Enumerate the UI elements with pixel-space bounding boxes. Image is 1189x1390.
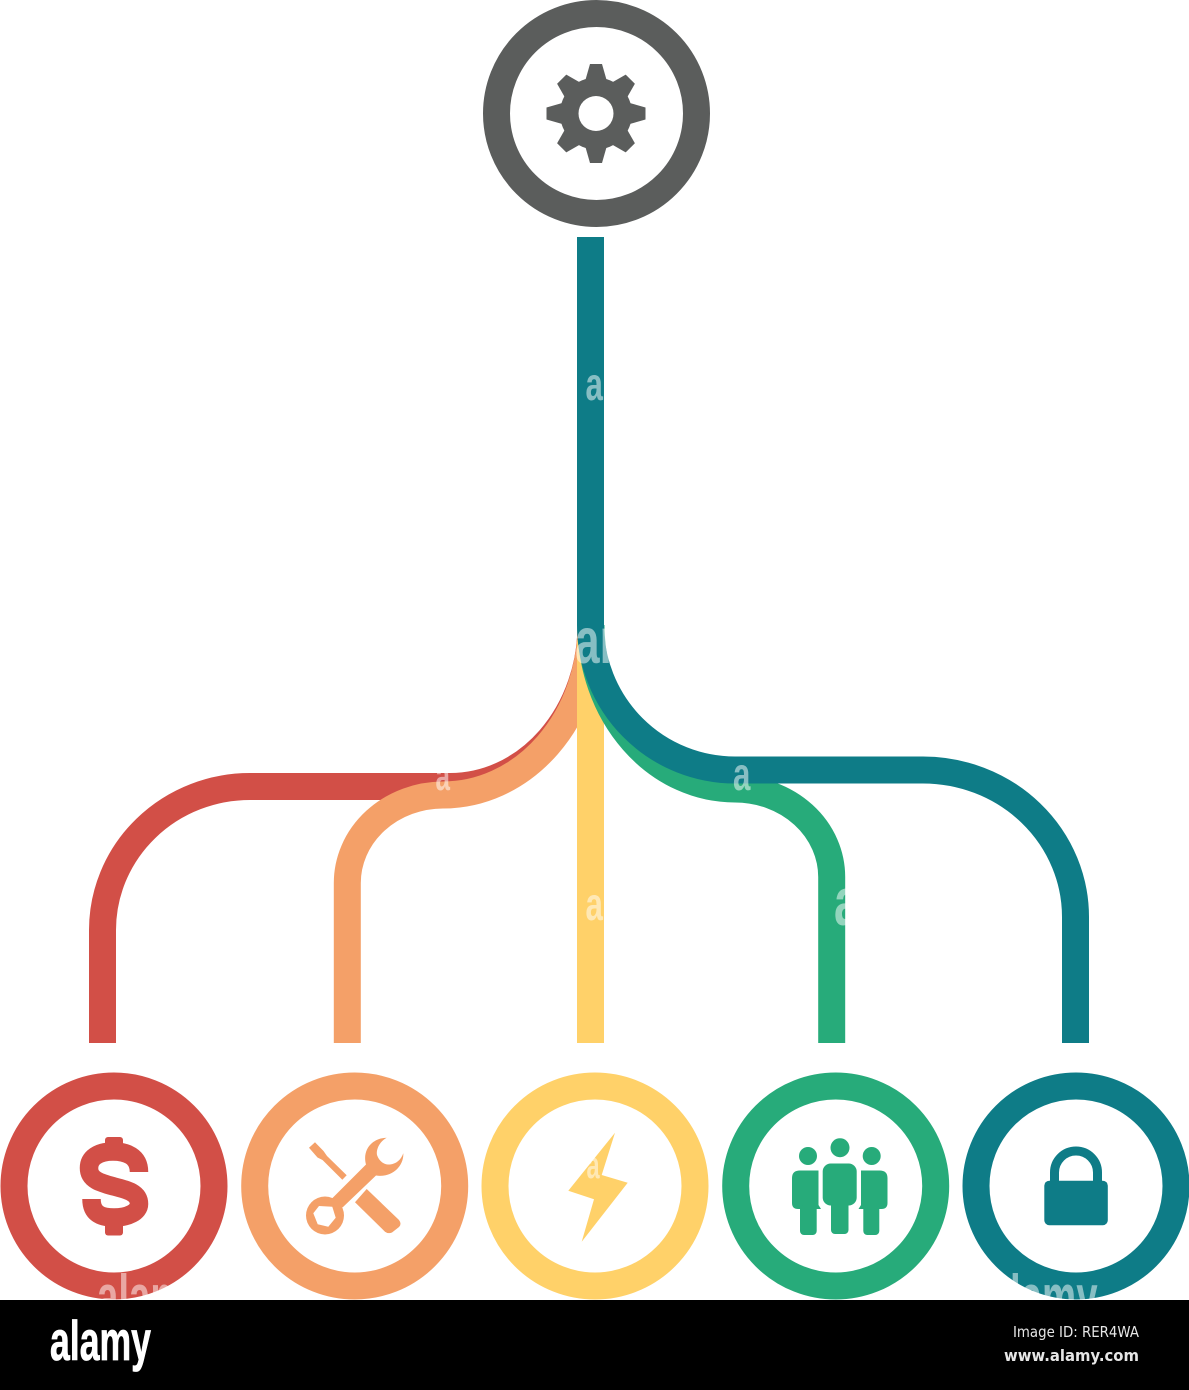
- watermark letters: a: [834, 864, 860, 940]
- node: energy: [495, 1086, 695, 1286]
- footer bar: [0, 1300, 1189, 1390]
- connector: orange branch: [347, 625, 591, 1043]
- node: security: [976, 1086, 1176, 1286]
- connector: yellow branch: [577, 640, 604, 1043]
- connector: green branch: [591, 625, 832, 1043]
- top circle: settings gear: [496, 14, 696, 214]
- node: tools: [255, 1086, 455, 1286]
- node: people: [736, 1086, 936, 1286]
- watermark letters: alam: [97, 1262, 185, 1331]
- footer image id: Image ID: RER4WA: [1013, 1323, 1140, 1341]
- icon: dollar sign: [89, 1137, 139, 1236]
- icon: gear: [546, 64, 646, 163]
- watermark letters: a: [586, 359, 604, 411]
- watermark letters: a: [436, 753, 450, 800]
- icon: group of three people: [792, 1138, 888, 1235]
- watermark letters: a: [733, 749, 751, 801]
- watermark letters: a: [586, 1143, 600, 1186]
- icon: lightning bolt: [568, 1133, 628, 1242]
- connector: red branch: [102, 625, 591, 1043]
- footer website: www.alamy.com: [1004, 1346, 1139, 1365]
- node: money: [14, 1086, 214, 1286]
- connector: teal trunk and branch: [590, 237, 1076, 1043]
- icon: crossed wrench and screwdriver: [306, 1138, 403, 1234]
- watermark letters: am: [575, 605, 639, 677]
- watermark letters: a: [586, 879, 604, 931]
- icon: padlock: [1044, 1151, 1108, 1225]
- watermark letters: lamy: [1010, 1262, 1098, 1331]
- watermark letters: [97, 359, 1098, 1331]
- footer logo: alamy: [50, 1309, 151, 1372]
